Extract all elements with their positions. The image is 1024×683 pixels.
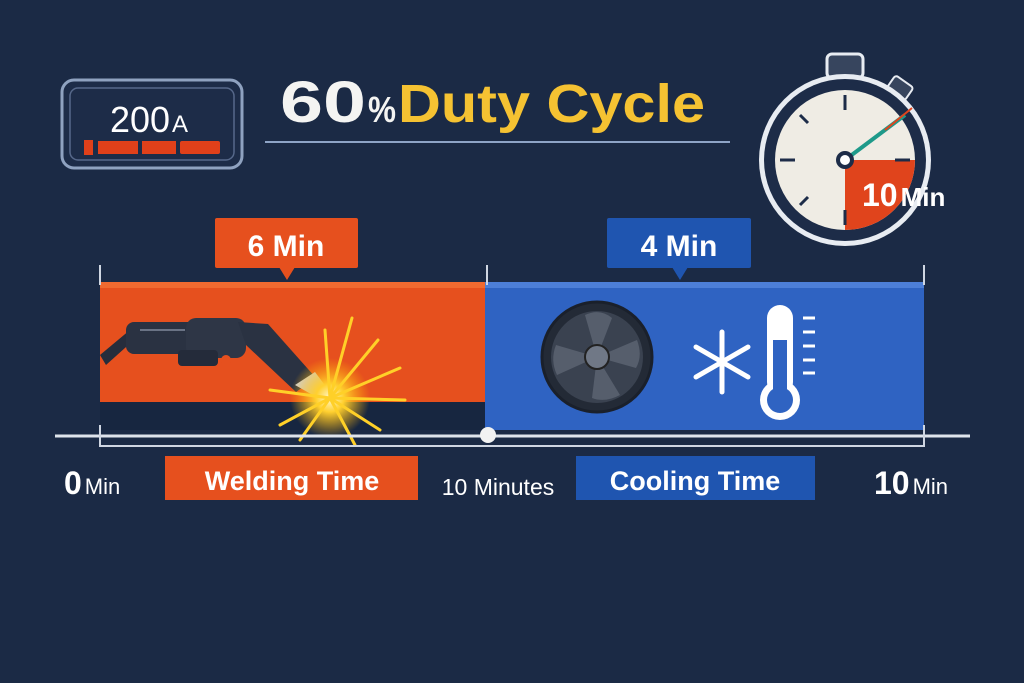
title: % <box>368 89 396 130</box>
panel: cooling bar <box>485 282 924 430</box>
icon: welding torch <box>100 318 330 398</box>
text: 10 Minutes: 10 Minutes <box>442 474 554 500</box>
icon: snowflake <box>696 332 748 392</box>
text: 10 Min: 10Min <box>874 465 948 501</box>
bar: amperage level <box>84 140 220 155</box>
title: 60 <box>280 70 366 135</box>
title <box>265 70 730 142</box>
icon: thermometer <box>760 305 815 420</box>
callout: 6 Min: 6 Min <box>248 230 324 263</box>
label: Cooling Time <box>576 456 815 500</box>
panel: welding bar <box>100 282 485 445</box>
title: Duty Cycle <box>398 74 705 134</box>
panel: amperage display: A <box>172 111 188 138</box>
icon: sparks <box>270 318 405 445</box>
callout: 4 Min <box>607 218 751 280</box>
label: Welding Time: Welding Time <box>205 466 379 496</box>
icon: stopwatch <box>759 54 945 246</box>
callout: 6 Min <box>215 218 358 280</box>
timeline <box>55 265 970 446</box>
icon: fan <box>542 302 652 412</box>
text: 200A: 200 <box>110 99 170 140</box>
callout: 4 Min: 4 Min <box>641 230 717 263</box>
text: 10 Min: 10Min <box>862 177 945 213</box>
label: Cooling Time: Cooling Time <box>610 466 780 496</box>
panel: amperage display <box>62 80 242 168</box>
label: Welding Time <box>165 456 418 500</box>
text: 0 Min: 0Min <box>64 465 120 501</box>
